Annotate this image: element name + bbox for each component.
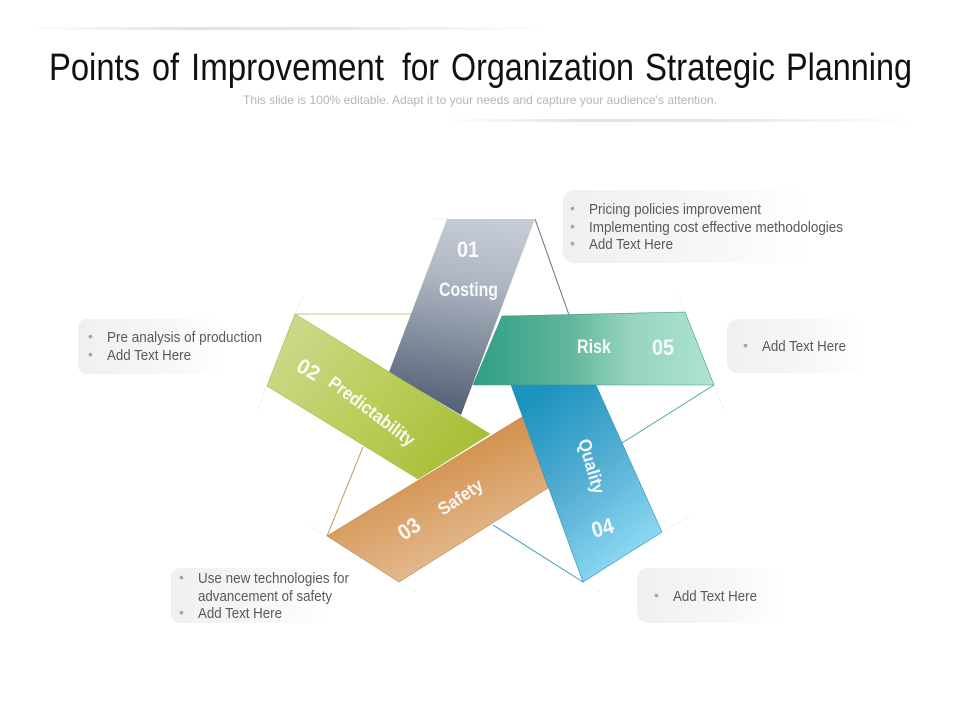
callout: 01 Costing notes: Implementing cost effective methodologies <box>589 220 843 236</box>
callout: 01 Costing notes: • <box>570 235 575 251</box>
number 03: 03 <box>393 512 425 545</box>
title: Organization <box>451 47 634 89</box>
thin connecting lines of the star <box>295 219 714 582</box>
title: of <box>152 47 179 89</box>
top decorative rule <box>30 27 550 30</box>
callout: 05 Risk notes: Add Text Here <box>762 339 846 355</box>
label Risk: Risk <box>577 337 611 358</box>
callout: 03 Safety notes: • <box>179 569 184 585</box>
callout: 03 Safety notes: • <box>179 604 184 620</box>
label Costing: Costing <box>439 280 498 301</box>
bottom header rule <box>445 119 915 122</box>
title: Points <box>49 47 140 89</box>
callout: 02 Predictability notes: Pre analysis of production <box>107 330 262 346</box>
title: for <box>402 47 439 89</box>
band: 01 Costing <box>389 219 535 415</box>
title <box>49 47 912 89</box>
callout: 01 Costing notes <box>563 190 843 263</box>
band: 02 Predictability <box>267 314 490 479</box>
faint tip extension lines <box>257 219 724 592</box>
callout: 02 Predictability notes: • <box>88 328 93 344</box>
band: 03 Safety <box>327 417 548 582</box>
number 02: 02 <box>292 354 324 386</box>
subtitle: This slide is 100% editable. Adapt it to your needs and capture your audience's attention. <box>243 93 717 107</box>
label Predictability: Predictability <box>325 372 419 450</box>
callout: 04 Quality notes <box>637 568 782 623</box>
callout: 02 Predictability notes: • <box>88 346 93 362</box>
callout: 04 Quality notes: Add Text Here <box>673 589 757 605</box>
callout: 02 Predictability notes: Add Text Here <box>107 348 191 364</box>
callout: 03 Safety notes: Use new technologies for <box>198 571 349 587</box>
callout: 02 Predictability notes <box>78 319 262 374</box>
callout: 03 Safety notes: advancement of safety <box>198 589 333 605</box>
number 01: 01 <box>457 237 479 262</box>
callout: 01 Costing notes: • <box>570 218 575 234</box>
number 05: 05 <box>652 335 674 360</box>
callout: 01 Costing notes: • <box>570 200 575 216</box>
number 04: 04 <box>588 513 617 543</box>
callout: 05 Risk notes <box>727 319 867 373</box>
title: Planning <box>786 47 912 89</box>
label Safety: Safety <box>434 475 487 519</box>
callout: 03 Safety notes <box>171 568 349 623</box>
band: 04 Quality <box>511 385 662 582</box>
callout: 04 Quality notes: • <box>654 587 659 603</box>
title: Strategic <box>645 47 775 89</box>
label Quality: Quality <box>574 437 609 496</box>
band: 05 Risk <box>473 312 714 385</box>
callout: 01 Costing notes: Add Text Here <box>589 237 673 253</box>
callout: 05 Risk notes: • <box>743 337 748 353</box>
title: Improvement <box>191 47 384 89</box>
callout: 01 Costing notes: Pricing policies improvement <box>589 202 761 218</box>
callout: 03 Safety notes: Add Text Here <box>198 606 282 622</box>
